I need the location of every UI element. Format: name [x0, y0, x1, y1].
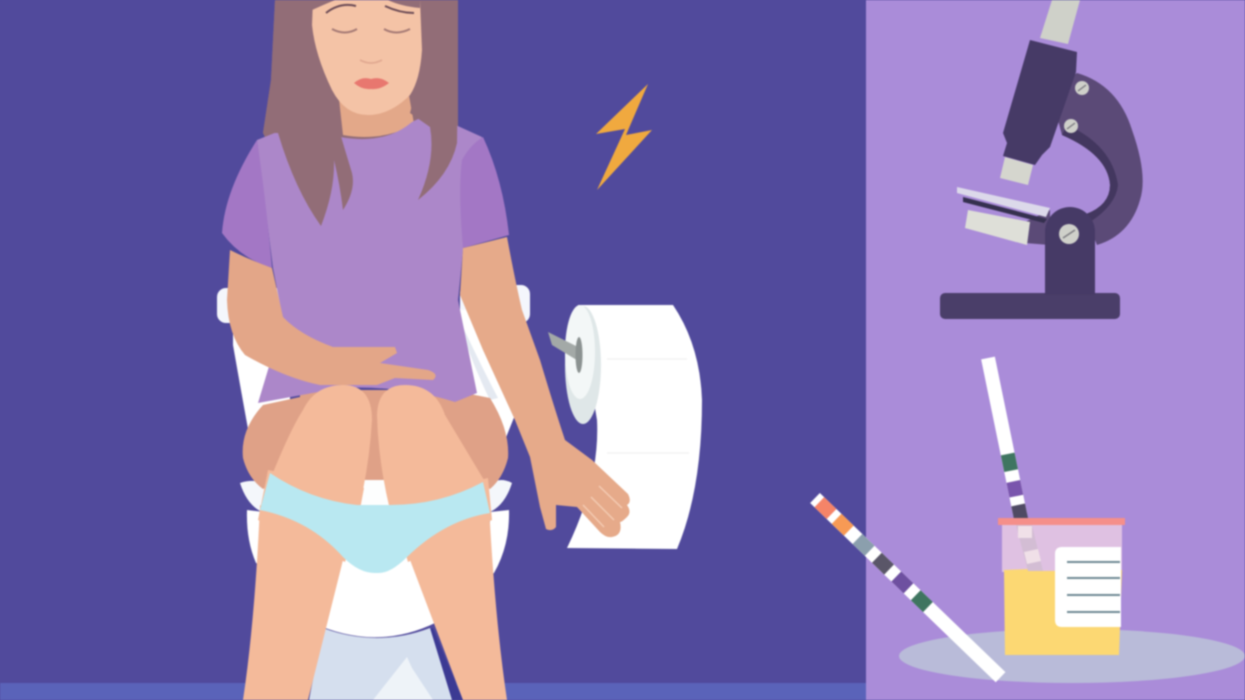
- submerged strip: [1016, 525, 1043, 571]
- tube body: [1003, 40, 1077, 165]
- screws: [1059, 81, 1089, 244]
- cup rim: [998, 518, 1125, 525]
- toilet base: [285, 625, 463, 700]
- stage plate: [957, 187, 1050, 217]
- bangs: [312, 0, 420, 10]
- eyebrows: [326, 5, 414, 13]
- floor strip: [0, 683, 867, 700]
- test strip on table: [810, 493, 1005, 682]
- icon: microscope: [940, 0, 1143, 319]
- arm: [1050, 73, 1143, 245]
- label lines: [1067, 562, 1120, 612]
- front hair right: [410, 0, 458, 200]
- panel: dark blue background: [0, 0, 867, 700]
- hips and torso shadow: [243, 390, 508, 489]
- stage connector: [1025, 210, 1050, 245]
- lips: [354, 78, 389, 89]
- shadow ellipse: [899, 629, 1245, 683]
- arm right with hand: [460, 237, 630, 537]
- icon: toilet paper roll: [548, 305, 702, 549]
- arm inner shadow: [1062, 125, 1118, 222]
- cup label: [1055, 547, 1121, 627]
- cup upper: [1002, 522, 1122, 572]
- nose: [360, 60, 382, 63]
- lower legs: [243, 505, 345, 700]
- toilet: [217, 285, 530, 700]
- woman: [222, 0, 630, 700]
- shirt body: [257, 113, 482, 403]
- pillar: [1045, 207, 1095, 295]
- stage block: [965, 210, 1030, 245]
- roll body: [567, 305, 702, 549]
- thighs: [270, 385, 372, 490]
- panel: lilac background: [866, 0, 1245, 700]
- face: [312, 0, 422, 115]
- submerged strip squares: [1018, 526, 1041, 564]
- shirt sleeve right: [460, 137, 509, 248]
- test strip in cup: [981, 357, 1028, 521]
- toilet seat lower right: [486, 480, 512, 512]
- toilet gap: [358, 480, 392, 510]
- finger highlights: [583, 486, 622, 527]
- toilet seat left wing: [217, 288, 287, 323]
- toilet seat lower left: [240, 481, 268, 512]
- neck: [338, 90, 414, 137]
- closed eyes: [332, 29, 410, 32]
- eyepiece tube: [1040, 0, 1080, 44]
- skin behind underwear: [258, 470, 492, 562]
- base: [940, 293, 1120, 319]
- perforation lines: [607, 359, 689, 453]
- lens: [1000, 157, 1033, 185]
- toilet bowl: [313, 550, 437, 637]
- spindle: [548, 332, 580, 362]
- urine cup: [998, 518, 1125, 655]
- underwear: [260, 473, 490, 573]
- shirt sleeve left: [222, 140, 272, 268]
- icon: lightning bolt: [596, 84, 652, 190]
- roll end: [565, 306, 601, 424]
- toilet seat right wing: [460, 285, 530, 323]
- front hair left: [263, 0, 353, 226]
- urine: [1004, 569, 1122, 655]
- back hair: [263, 0, 458, 180]
- toilet tank sides: [233, 320, 290, 440]
- arm on stomach: [227, 250, 436, 385]
